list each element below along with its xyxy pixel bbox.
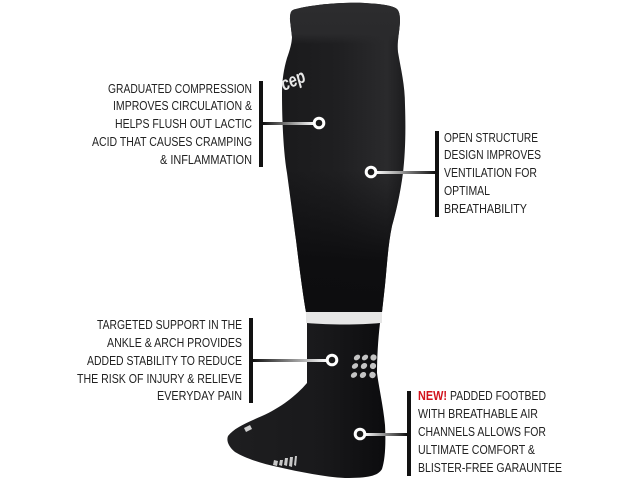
sock: leg tube <box>282 3 405 312</box>
callout text: IMPROVES CIRCULATION & <box>113 98 252 113</box>
callout marker <box>314 118 324 128</box>
callout text: ADDED STABILITY TO REDUCE <box>87 353 242 368</box>
callout leader line <box>263 122 315 125</box>
callout text <box>77 317 242 403</box>
callout bar <box>249 318 253 403</box>
callout leader line <box>253 359 328 362</box>
callout bar <box>259 81 263 167</box>
callout text: NEW! <box>418 388 447 403</box>
callout text: THE RISK OF INJURY & RELIEVE <box>77 371 242 386</box>
callout text: EVERYDAY PAIN <box>157 388 242 403</box>
sock: toe mark <box>244 425 252 432</box>
callout text: GRADUATED COMPRESSION <box>108 81 252 96</box>
callout bar <box>407 391 411 476</box>
sock: ankle and foot <box>227 323 385 478</box>
callout text: PADDED FOOTBED <box>450 388 546 403</box>
callout text: CHANNELS ALLOWS FOR <box>418 424 546 439</box>
callout text: & INFLAMMATION <box>160 152 252 167</box>
callout text: ULTIMATE COMFORT & <box>418 442 535 457</box>
callout text <box>444 130 541 216</box>
callout text: BREATHABILITY <box>444 201 527 216</box>
callout: graduated compression <box>92 81 324 167</box>
sock: ribbed cuff <box>290 2 400 42</box>
callout marker <box>366 167 376 177</box>
callout leader line <box>364 433 407 436</box>
sock: reflective dot grid <box>350 353 378 379</box>
callout text <box>418 388 562 475</box>
callout text: ANKLE & ARCH PROVIDES <box>107 335 242 350</box>
callout marker <box>327 355 337 365</box>
callout text: OPTIMAL <box>444 183 490 198</box>
callout: open structure <box>366 130 541 217</box>
sock: dark lower leg <box>288 184 402 312</box>
callout text: HELPS FLUSH OUT LACTIC <box>115 116 252 131</box>
callout text: VENTILATION FOR <box>444 165 537 180</box>
callout text <box>92 81 252 167</box>
callout: padded footbed <box>355 388 562 476</box>
callout text: TARGETED SUPPORT IN THE <box>97 317 242 332</box>
callout: targeted support <box>77 317 337 403</box>
callout text: ACID THAT CAUSES CRAMPING <box>92 134 252 149</box>
callout leader line <box>375 171 435 174</box>
callout text: DESIGN IMPROVES <box>444 147 541 162</box>
sock: sole grip marks <box>273 456 297 467</box>
callout text: BLISTER-FREE GARAUNTEE <box>418 460 562 475</box>
sock <box>227 0 410 478</box>
sock: cep logo: cep <box>277 66 309 96</box>
callout bar <box>435 131 439 217</box>
infographic: compression sock with four callouts <box>77 2 562 478</box>
sock: white band <box>306 312 382 324</box>
callout marker <box>355 429 365 439</box>
callout text: WITH BREATHABLE AIR <box>418 406 538 421</box>
callout text: OPEN STRUCTURE <box>444 130 538 145</box>
